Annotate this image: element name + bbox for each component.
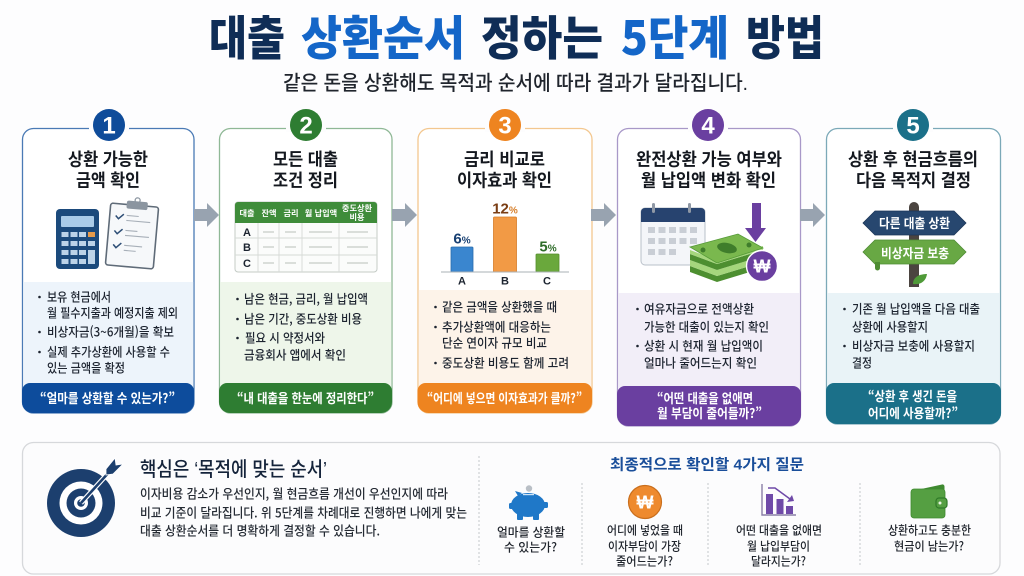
title: 5단계 xyxy=(621,0,729,69)
title: 대출 xyxy=(209,0,285,69)
step 2 bullet list xyxy=(236,288,368,364)
takeaway body text: 이자비용 감소가 우선인지, 월 현금흐름 개선이 우선인지에 따라 xyxy=(140,484,448,503)
step 4 bullet list: 상환 시 현재 월 납입액이 xyxy=(644,336,763,354)
bar chart: interest rates: 12% xyxy=(492,200,518,218)
question 2: 줄어드는가? xyxy=(616,551,673,569)
step 4 bullet list: 가능한 대출이 있는지 확인 xyxy=(644,316,769,336)
step number 1 xyxy=(93,109,125,141)
question 2: 이자부담이 가장 xyxy=(608,536,681,554)
panel: step 4 xyxy=(617,109,801,426)
icon: won coin xyxy=(746,250,778,282)
step 1 callout: “얼마를 상환할 수 있는가?” xyxy=(40,388,175,407)
icon: target with arrow xyxy=(47,458,123,537)
step 5 bullet list xyxy=(843,298,980,372)
arrow: step 3 to 4 xyxy=(591,203,616,227)
step 4 bullet list: 얼마나 줄어드는지 확인 xyxy=(644,352,757,372)
step 2 bullet list: 남은 현금, 금리, 월 납입액 xyxy=(244,288,368,308)
step number 2 xyxy=(290,109,322,141)
takeaway heading: 핵심은 ‘목적에 맞는 순서’ xyxy=(140,458,327,481)
panel: step 1 xyxy=(22,109,194,413)
step 4 bullet list xyxy=(636,298,769,372)
loan condition table: A xyxy=(243,227,251,239)
icon: wallet xyxy=(911,484,947,518)
step 3 bullet list: 중도상환 비용도 함께 고려 xyxy=(442,352,569,372)
icon: piggy bank xyxy=(509,485,548,520)
loan condition table: 잔액 xyxy=(261,207,277,219)
arrow: step 2 to 3 xyxy=(392,203,417,227)
step 1 bullet list: 실제 추가상환에 사용할 수 xyxy=(47,342,170,360)
step number 2: 2 xyxy=(299,112,313,140)
panel: key takeaway and questions xyxy=(22,442,1000,574)
question 1 xyxy=(497,485,565,555)
step 5 bullet list: 상환에 사용할지 xyxy=(852,316,928,336)
loan condition table: B xyxy=(243,242,251,254)
bar chart: interest rates: 6% xyxy=(453,230,471,248)
step 5 callout: 어디에 사용할까?” xyxy=(868,403,958,422)
step 5 callout: “상환 후 생긴 돈을 xyxy=(868,386,957,405)
step 3 heading: 이자효과 확인 xyxy=(457,168,552,192)
step number 4 xyxy=(692,109,724,141)
question 4: 상환하고도 충분한 xyxy=(888,520,971,538)
arrow: step 1 to 2 xyxy=(194,203,219,227)
question 4 xyxy=(888,484,971,554)
title: 상환순서 xyxy=(301,0,465,69)
step 4 callout: 월 부담이 줄어들까?” xyxy=(657,403,762,422)
question 4: 현금이 남는가? xyxy=(894,536,964,554)
icon: signpost xyxy=(863,202,966,287)
loan condition table xyxy=(235,202,377,272)
step 5 bullet list: 비상자금 보충에 사용할지 xyxy=(852,336,975,354)
step 4 heading: 완전상환 가능 여부와 xyxy=(636,146,782,172)
step number 3 xyxy=(489,109,521,141)
loan condition table: C xyxy=(243,258,251,270)
step 2 bullet list: 남은 기간, 중도상환 비용 xyxy=(244,308,362,328)
icon: won coin orange: ₩ xyxy=(636,492,654,512)
bar chart: interest rates xyxy=(441,200,569,288)
step 1 heading: 상환 가능한 xyxy=(68,146,148,172)
step 5 heading: 다음 목적지 결정 xyxy=(856,168,971,192)
step number 5: 5 xyxy=(906,112,920,140)
question 3: 어떤 대출을 없애면 xyxy=(736,520,822,538)
step 1 bullet list: 비상자금(3~6개월)을 확보 xyxy=(47,322,174,340)
step 5 bullet list: 결정 xyxy=(852,352,872,372)
step 1 bullet list: 있는 금액을 확정 xyxy=(47,358,125,376)
loan condition table: 금리 xyxy=(283,207,299,219)
question 1: 얼마를 상환할 xyxy=(497,522,565,540)
question 1: 수 있는가? xyxy=(504,537,557,555)
step 3 bullet list xyxy=(434,296,569,372)
step 3 heading xyxy=(457,146,552,192)
bar chart: interest rates: 5% xyxy=(539,238,557,256)
question 3: 달라지는가? xyxy=(751,551,806,569)
loan condition table: 중도상환 xyxy=(342,202,373,214)
icon: won coin: ₩ xyxy=(754,256,770,276)
step 3 bullet list: 단순 연이자 규모 비교 xyxy=(442,332,547,352)
step 4 callout: “어떤 대출을 없애면 xyxy=(657,388,753,407)
step number 3: 3 xyxy=(498,112,512,140)
title: 정하는 xyxy=(481,0,603,69)
step 3 bullet list: 같은 금액을 상환했을 때 xyxy=(442,296,557,316)
step 2 heading: 조건 정리 xyxy=(273,168,338,192)
title: 방법 xyxy=(746,0,824,69)
step 5 heading: 상환 후 현금흐름의 xyxy=(848,146,978,172)
icon: falling bar chart xyxy=(762,484,796,515)
step 2 bullet list: 금융회사 앱에서 확인 xyxy=(244,344,346,364)
arrow: step 4 to 5 xyxy=(800,203,825,227)
panel: step 3 xyxy=(418,109,592,413)
takeaway body text: 비교 기준이 달라집니다. 위 5단계를 차례대로 진행하면 나에게 맞는 xyxy=(140,503,467,522)
step 3 heading: 금리 비교로 xyxy=(464,146,545,172)
loan condition table: 월 납입액 xyxy=(305,207,337,219)
step 3 callout: “어디에 넣으면 이자효과가 클까?” xyxy=(427,388,582,407)
step 5 callout xyxy=(868,386,958,422)
step 4 heading: 월 납입액 변화 확인 xyxy=(641,168,776,192)
step 1 heading xyxy=(68,146,148,192)
question 3: 월 납입부담이 xyxy=(747,536,810,554)
step 4 bullet list: 여유자금으로 전액상환 xyxy=(644,298,754,318)
bar chart: interest rates: B xyxy=(501,276,509,288)
question 3 xyxy=(736,484,822,569)
step number 4: 4 xyxy=(701,112,715,140)
step 2 heading xyxy=(273,146,338,192)
icon: signpost: 비상자금 보충 xyxy=(881,246,949,261)
step 2 bullet list: 필요 시 약정서와 xyxy=(245,328,325,346)
panel: step 2 xyxy=(219,109,392,413)
step 5 bullet list: 기존 월 납입액을 다음 대출 xyxy=(852,298,980,318)
questions heading: 최종적으로 확인할 4가지 질문 xyxy=(610,456,804,474)
step 1 bullet list: 월 필수지출과 예정지출 제외 xyxy=(47,302,178,322)
question 2: 어디에 넣었을 때 xyxy=(607,520,683,538)
loan condition table: 대출 xyxy=(239,207,255,219)
panel: step 5 xyxy=(826,109,1001,424)
loan condition table: 비용 xyxy=(349,211,365,223)
takeaway body text: 대출 상환순서를 더 명확하게 결정할 수 있습니다. xyxy=(140,521,380,540)
icon: calendar xyxy=(641,203,705,265)
step 1 heading: 금액 확인 xyxy=(76,168,140,192)
step 2 heading: 모든 대출 xyxy=(273,146,338,172)
question 2 xyxy=(607,486,683,569)
step 4 callout xyxy=(657,388,762,422)
subtitle: 같은 돈을 상환해도 목적과 순서에 따라 결과가 달라집니다. xyxy=(283,72,748,95)
step number 5 xyxy=(897,109,929,141)
step number 1: 1 xyxy=(102,112,116,140)
icon: cash stack xyxy=(690,234,763,282)
icon: downward arrow xyxy=(745,203,766,242)
step 1 bullet list xyxy=(38,286,178,376)
bar chart: interest rates: A xyxy=(458,276,466,288)
bar chart: interest rates: C xyxy=(543,276,551,288)
step 4 heading xyxy=(636,146,782,192)
icon: calculator xyxy=(56,209,99,269)
step 1 bullet list: 보유 현금에서 xyxy=(47,286,111,306)
step 3 bullet list: 추가상환액에 대응하는 xyxy=(442,316,551,336)
icon: signpost: 다른 대출 상환 xyxy=(879,216,950,231)
takeaway body text xyxy=(140,484,467,540)
step 5 heading xyxy=(848,146,978,192)
step 2 callout: “내 대출을 한눈에 정리한다” xyxy=(237,388,374,407)
icon: clipboard checklist xyxy=(105,196,159,269)
title xyxy=(209,0,824,69)
